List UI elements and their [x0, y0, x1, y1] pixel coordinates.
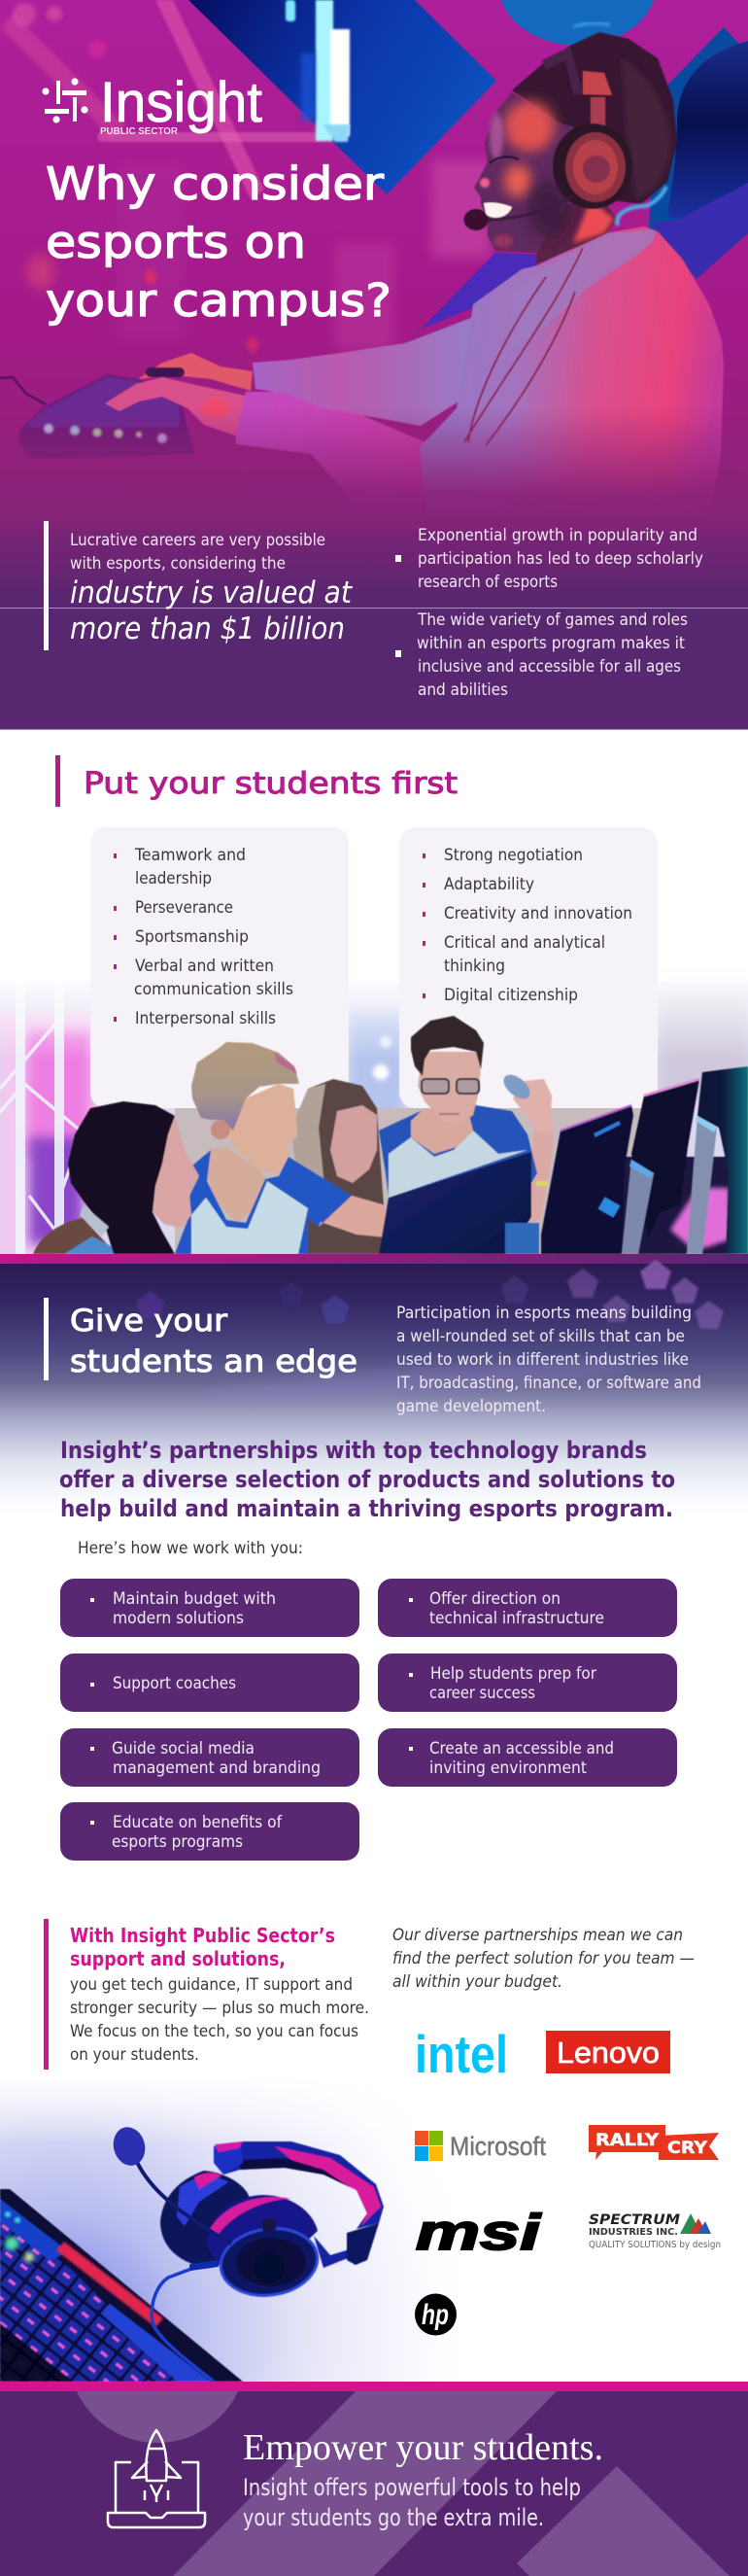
- keyboard: [19, 374, 194, 459]
- callout: industry value: Lucrative careers are very possible: [70, 531, 325, 550]
- title: Why consider: [46, 157, 384, 210]
- right intro text: [392, 1926, 695, 1992]
- stand 1: [622, 1160, 654, 1254]
- heading: [44, 1298, 357, 1380]
- button: maintain budget: Maintain budget with: [113, 1589, 276, 1608]
- pink floor glow: [670, 1188, 731, 1251]
- bokeh pentagons: [136, 1260, 724, 1329]
- logo: Rally Cry: CRY: [667, 2139, 708, 2158]
- collar and sleeve: [189, 1150, 352, 1254]
- shoulders: [33, 1218, 117, 1254]
- button: support coaches: [60, 1654, 359, 1712]
- button: career success: Help students prep for: [430, 1664, 596, 1683]
- logo mark: [42, 78, 88, 123]
- blue shirt: [379, 1105, 537, 1198]
- logo: hp: [415, 2294, 457, 2335]
- ear: [211, 1120, 230, 1139]
- lower blue diamond: [410, 253, 536, 340]
- front cushion: [207, 2195, 318, 2265]
- button: career success: career success: [429, 1684, 535, 1702]
- headphones: [160, 2141, 384, 2302]
- dark background behind monitors: [622, 1157, 748, 1254]
- face: [418, 1052, 481, 1125]
- button: career success: [378, 1654, 677, 1712]
- logo: intel: intel: [415, 2024, 508, 2084]
- button: educate: Educate on benefits of: [113, 1813, 283, 1831]
- title: esports on: [46, 216, 306, 268]
- student: boy in centre: [175, 1042, 387, 1254]
- paragraph: IT, broadcasting, finance, or software and: [396, 1374, 701, 1393]
- button: educate: esports programs: [112, 1832, 243, 1851]
- hood: [510, 229, 655, 352]
- cable: [152, 2265, 214, 2382]
- bottom fade of hero photo: [0, 408, 748, 530]
- card: skills column 1: [90, 827, 349, 1108]
- card: skills column 1: Interpersonal skills: [135, 1009, 276, 1028]
- callout: support and solutions: We focus on the tech, so you can focus: [70, 2022, 358, 2041]
- button: social media: management and branding: [113, 1758, 321, 1777]
- closing headline: Empower your students.: [243, 2427, 603, 2468]
- blue circle: [501, 0, 654, 46]
- paragraph: game development.: [396, 1397, 546, 1416]
- hoodie cords: [464, 248, 583, 445]
- front ear cup: [217, 2222, 322, 2302]
- button: social media: [60, 1728, 359, 1787]
- mic boom: [136, 2160, 231, 2244]
- monitor 2: [541, 1105, 633, 1254]
- bullet: variety: The wide variety of games and roles: [417, 610, 688, 630]
- button: maintain budget: [60, 1579, 359, 1637]
- callout: support and solutions: you get tech guidance, IT support and: [70, 1975, 353, 1995]
- button: educate: [60, 1802, 359, 1861]
- logo: Microsoft: Microsoft: [450, 2132, 546, 2161]
- right intro text: find the perfect solution for you team —: [392, 1949, 695, 1968]
- panel: put your students first: [0, 729, 748, 1264]
- bullet: variety: [395, 610, 688, 700]
- footer geometric shapes: [77, 2391, 730, 2576]
- closing text: your students go the extra mile.: [243, 2504, 544, 2531]
- headset and keyboard photo: [0, 2075, 457, 2382]
- neck: [411, 1108, 473, 1154]
- callout: industry value: industry is valued at: [70, 575, 354, 610]
- panel: give your students an edge: [0, 1260, 748, 1861]
- button: technical infrastructure: [378, 1579, 677, 1637]
- title: your campus?: [46, 274, 391, 327]
- card: skills column 2: Adaptability: [444, 875, 534, 894]
- player: [0, 23, 724, 515]
- card: skills column 2: Critical and analytical: [444, 933, 605, 953]
- yoke arm: [314, 2236, 353, 2268]
- card: skills column 2: Creativity and innovation: [444, 904, 632, 923]
- logo: Microsoft: [415, 2131, 546, 2161]
- headset: [80, 1205, 109, 1236]
- card: skills column 1: Verbal and written: [135, 957, 274, 976]
- logo: Rally Cry: RALLY: [595, 2131, 660, 2150]
- callout: industry value: more than $1 billion: [70, 611, 345, 646]
- button: accessible environment: inviting environment: [429, 1758, 588, 1777]
- bullet: variety: and abilities: [418, 680, 508, 700]
- card: skills column 1: leadership: [135, 869, 212, 888]
- button: social media: Guide social media: [112, 1739, 255, 1758]
- closing text: [243, 2474, 581, 2531]
- logo: msi: msi: [416, 2205, 542, 2261]
- rear ear cup: [160, 2171, 250, 2268]
- logo: Spectrum Industries: [589, 2212, 721, 2250]
- callout: support and solutions: support and solutions,: [70, 1947, 286, 1970]
- logo: hp: hp: [422, 2299, 449, 2331]
- card: skills column 1: Sportsmanship: [135, 927, 249, 947]
- button: maintain budget: modern solutions: [113, 1609, 244, 1627]
- white tee: [191, 1181, 308, 1254]
- logo: Insight Public Sector: [42, 71, 262, 137]
- panel: empower footer: [0, 2382, 748, 2576]
- intro text: Here’s how we work with you:: [78, 1539, 303, 1558]
- wordmark: Insight: [100, 71, 262, 134]
- headband: [214, 2141, 384, 2229]
- title: [46, 157, 391, 327]
- bullet: growth: [395, 526, 703, 592]
- bullet: growth: research of esports: [418, 573, 558, 592]
- card: skills column 2: [399, 827, 658, 1108]
- bullet: variety: within an esports program makes it: [417, 634, 685, 653]
- bullet: variety: inclusive and accessible for all ages: [418, 657, 681, 677]
- glasses: [422, 1079, 479, 1094]
- monitor 4: [697, 1066, 748, 1254]
- card: skills column 2: Strong negotiation: [444, 846, 583, 865]
- pink rule: [0, 2382, 748, 2391]
- button: accessible environment: Create an accessible and: [429, 1739, 614, 1758]
- callout: industry value: [44, 521, 354, 650]
- logo: Insight Public Sector: PUBLIC SECTOR: [100, 125, 178, 137]
- face: [226, 1084, 297, 1173]
- hero blurred background shapes: [0, 0, 491, 353]
- stand 2: [687, 1116, 717, 1254]
- top yoke: [214, 2142, 243, 2175]
- blue diamond with neon light: [188, 0, 496, 194]
- card: skills column 1: communication skills: [134, 980, 293, 999]
- partnerships statement: Insight’s partnerships with top technology brands: [60, 1437, 647, 1464]
- eye and smile: [490, 157, 519, 163]
- card: skills column 2: thinking: [444, 957, 505, 976]
- hair: [411, 1016, 484, 1076]
- icon: rocket launching from laptop: [108, 2430, 205, 2527]
- callout: support and solutions: [44, 1919, 369, 2070]
- gaming chair: [651, 41, 748, 279]
- button: technical infrastructure: Offer direction on: [429, 1589, 561, 1608]
- upper sleeve: [253, 316, 491, 426]
- card: skills column 1: Perseverance: [135, 898, 233, 918]
- button: support coaches: Support coaches: [113, 1674, 236, 1692]
- raised arm and hand: [527, 1128, 554, 1225]
- blue hair rim light: [617, 187, 666, 226]
- monitors: [379, 1066, 748, 1254]
- blue left trim: [175, 1210, 191, 1254]
- neck: [536, 199, 617, 264]
- panel: hero: [0, 0, 748, 729]
- stage truss: [0, 982, 83, 1254]
- gradient bar: [0, 1254, 748, 1264]
- face: [474, 92, 573, 253]
- right intro text: Our diverse partnerships mean we can: [392, 1926, 683, 1945]
- hair: [512, 32, 677, 204]
- partnerships statement: offer a diverse selection of products and solutions to: [59, 1466, 675, 1493]
- photo background: [0, 972, 748, 1254]
- button: technical infrastructure: technical infrastructure: [429, 1609, 604, 1627]
- student: girl in the back: [293, 1079, 386, 1254]
- partnerships statement: [59, 1437, 675, 1522]
- callout: support and solutions: on your students.: [70, 2045, 199, 2065]
- logo: Rally Cry: [589, 2125, 719, 2160]
- closing text: Insight offers powerful tools to help: [243, 2474, 581, 2501]
- logo: Lenovo: [546, 2031, 670, 2073]
- photo: students at monitors: [33, 1016, 748, 1254]
- partnerships statement: help build and maintain a thriving esports program.: [60, 1495, 673, 1522]
- paragraph: Participation in esports means building: [396, 1304, 692, 1323]
- heading: Give your: [70, 1304, 227, 1339]
- lower sleeve: [235, 392, 515, 505]
- hair: [68, 1101, 175, 1254]
- callout: support and solutions: stronger security — plus so much more.: [70, 1999, 369, 2018]
- neck: [206, 1147, 265, 1223]
- logo: Spectrum Industries: QUALITY SOLUTIONS by design: [589, 2240, 721, 2250]
- heading: students an edge: [70, 1344, 357, 1379]
- right diamond: [649, 27, 748, 279]
- paragraph: a well-rounded set of skills that can be: [396, 1327, 685, 1346]
- student: girl left: [33, 1101, 199, 1254]
- heading: [55, 755, 458, 807]
- front hand: [105, 377, 246, 435]
- paragraph: [396, 1304, 701, 1416]
- heading: Put your students first: [84, 767, 458, 801]
- bullet: growth: Exponential growth in popularity and: [418, 526, 697, 545]
- hair: [191, 1042, 299, 1131]
- right intro text: all within your budget.: [392, 1972, 562, 1992]
- front monitor: [379, 1152, 531, 1254]
- monitor 3: [631, 1079, 699, 1237]
- button: accessible environment: [378, 1728, 677, 1787]
- card: skills column 2: Digital citizenship: [444, 986, 578, 1005]
- keyboard cable: [0, 377, 46, 404]
- callout: support and solutions: With Insight Public Sector’s: [70, 1924, 335, 1947]
- paragraph: used to work in different industries like: [396, 1350, 689, 1370]
- card: skills column 1: Teamwork and: [134, 846, 246, 865]
- logo: Spectrum Industries: INDUSTRIES INC.: [589, 2227, 678, 2238]
- headset: [542, 47, 583, 94]
- logo: Lenovo: Lenovo: [557, 2036, 660, 2070]
- face: [153, 1116, 199, 1228]
- logo: Spectrum Industries: SPECTRUM: [589, 2212, 680, 2228]
- hoodie torso: [420, 226, 724, 515]
- arm: [319, 1196, 387, 1237]
- callout: industry value: with esports, considering the: [70, 554, 286, 574]
- bullet: growth: participation has led to deep scholarly: [418, 549, 703, 569]
- divider line: [0, 608, 748, 609]
- student: right boy: [379, 1016, 554, 1225]
- panel: support and partners: [0, 1919, 721, 2382]
- back hand: [138, 353, 253, 391]
- keyboard: [0, 2189, 243, 2382]
